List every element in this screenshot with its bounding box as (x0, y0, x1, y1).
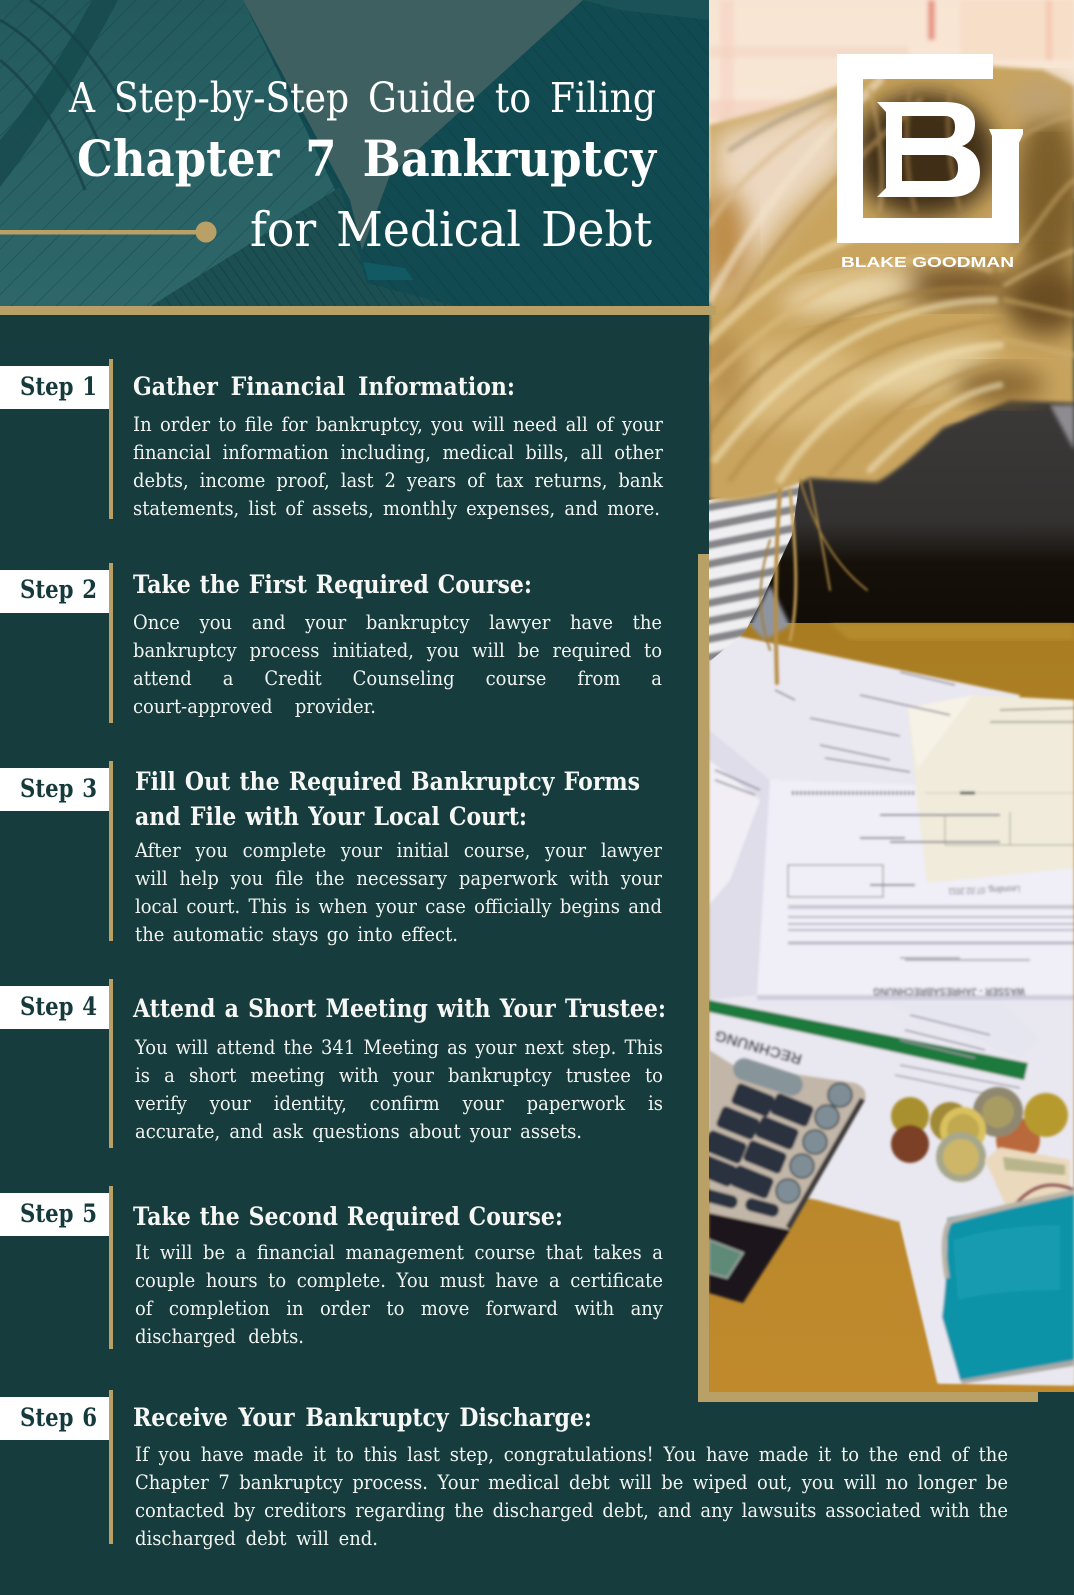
text: contacted by creditors regarding the discharged debt, and any lawsuits associated with the (135, 1498, 1008, 1522)
photo coins (891, 1087, 1068, 1182)
logo: Blake Goodman (837, 54, 1023, 271)
text: You will attend the 341 Meeting as your next step. This (135, 1036, 663, 1058)
gold frame behind photo (698, 554, 1038, 1402)
photo upside-down paper captions: Leonding, 07.02.2011 (948, 884, 1020, 897)
text: discharged debts. (135, 1324, 304, 1348)
text: attend a Credit Counseling course from a (133, 666, 662, 690)
text: Take the Second Required Course: (133, 1202, 563, 1231)
photo upside-down paper captions: WASSER - JAHRESABRECHNUNG (873, 985, 1025, 997)
text: local court. This is when your case officially begins and (135, 894, 662, 918)
text: Chapter 7 Bankruptcy (77, 129, 656, 188)
text: discharged debt will end. (135, 1526, 378, 1550)
text: debts, income proof, last 2 years of tax returns, bank (133, 468, 663, 492)
photo calculator (692, 1050, 866, 1303)
photo banknote (985, 1147, 1070, 1215)
photo upside-down paper captions (873, 884, 1025, 997)
text: Take the First Required Course: (133, 570, 532, 599)
text: It will be a financial management course that takes a (135, 1240, 663, 1264)
text: court-approved provider. (133, 694, 376, 718)
text: Step 3 (20, 774, 97, 803)
text: If you have made it to this last step, congratulations! You have made it to the end of the (135, 1442, 1008, 1466)
text: is a short meeting with your bankruptcy trustee to (135, 1064, 663, 1086)
title (68, 74, 658, 258)
text: verify your identity, confirm your paperwork is (135, 1092, 663, 1114)
photo: woman with head down over medical bills (692, 0, 1074, 1392)
panel: step 2 (0, 563, 662, 723)
text: for Medical Debt (250, 202, 652, 258)
photo background wall (705, 0, 1074, 200)
text: couple hours to complete. You must have a certificate (135, 1268, 663, 1292)
text: Once you and your bankruptcy lawyer have the (133, 610, 662, 634)
text: Step 6 (20, 1403, 97, 1432)
photo bills and papers: RECHNUNG (713, 1026, 804, 1067)
icon: BG monogram frame (837, 54, 1023, 243)
text: and File with Your Local Court: (135, 802, 527, 831)
logo wordmark: BLAKE GOODMAN (841, 254, 1014, 271)
photo wood table (709, 623, 1074, 1392)
text: In order to file for bankruptcy, you will need all of your (133, 412, 663, 436)
text: financial information including, medical bills, all other (133, 440, 663, 464)
text: Step 4 (20, 992, 97, 1021)
text: will help you file the necessary paperwork with your (135, 866, 662, 890)
text: Step 2 (20, 575, 97, 604)
text: Attend a Short Meeting with Your Trustee: (133, 994, 666, 1023)
header background: teal tinted skyscrapers (0, 0, 709, 306)
header gold line with dot (0, 222, 216, 242)
panel: step 1 (0, 359, 664, 520)
text: statements, list of assets, monthly expenses, and more. (133, 496, 660, 520)
text: Step 5 (20, 1199, 97, 1228)
photo neck and right shoulder (951, 416, 966, 423)
text: Gather Financial Information: (133, 372, 515, 401)
photo teal coin purse (900, 1185, 1074, 1385)
photo blond hair (703, 58, 1074, 683)
text: Fill Out the Required Bankruptcy Forms (135, 767, 640, 796)
panel: step 6 (0, 1390, 1008, 1550)
photo striped sleeve (709, 480, 800, 662)
panel: step 3 (0, 761, 662, 946)
text: A Step-by-Step Guide to Filing (69, 74, 656, 122)
text: Chapter 7 bankruptcy process. Your medical debt will be wiped out, you will no longer be (135, 1470, 1008, 1494)
text: After you complete your initial course, your lawyer (135, 838, 662, 862)
photo bills and papers (709, 635, 1074, 1385)
panel: step 5 (0, 1186, 663, 1349)
text: bankruptcy process initiated, you will be required to (133, 638, 662, 662)
icon: B monogram letter (877, 102, 980, 197)
header gold rule (0, 306, 716, 315)
text: Step 1 (20, 372, 97, 401)
panel: step 4 (0, 979, 666, 1148)
text: the automatic stays go into effect. (135, 922, 458, 946)
text: Receive Your Bankruptcy Discharge: (133, 1403, 592, 1432)
text: of completion in order to move forward with any (135, 1296, 663, 1320)
text: accurate, and ask questions about your assets. (135, 1120, 582, 1142)
photo sweater and dark shadow (709, 390, 1074, 630)
